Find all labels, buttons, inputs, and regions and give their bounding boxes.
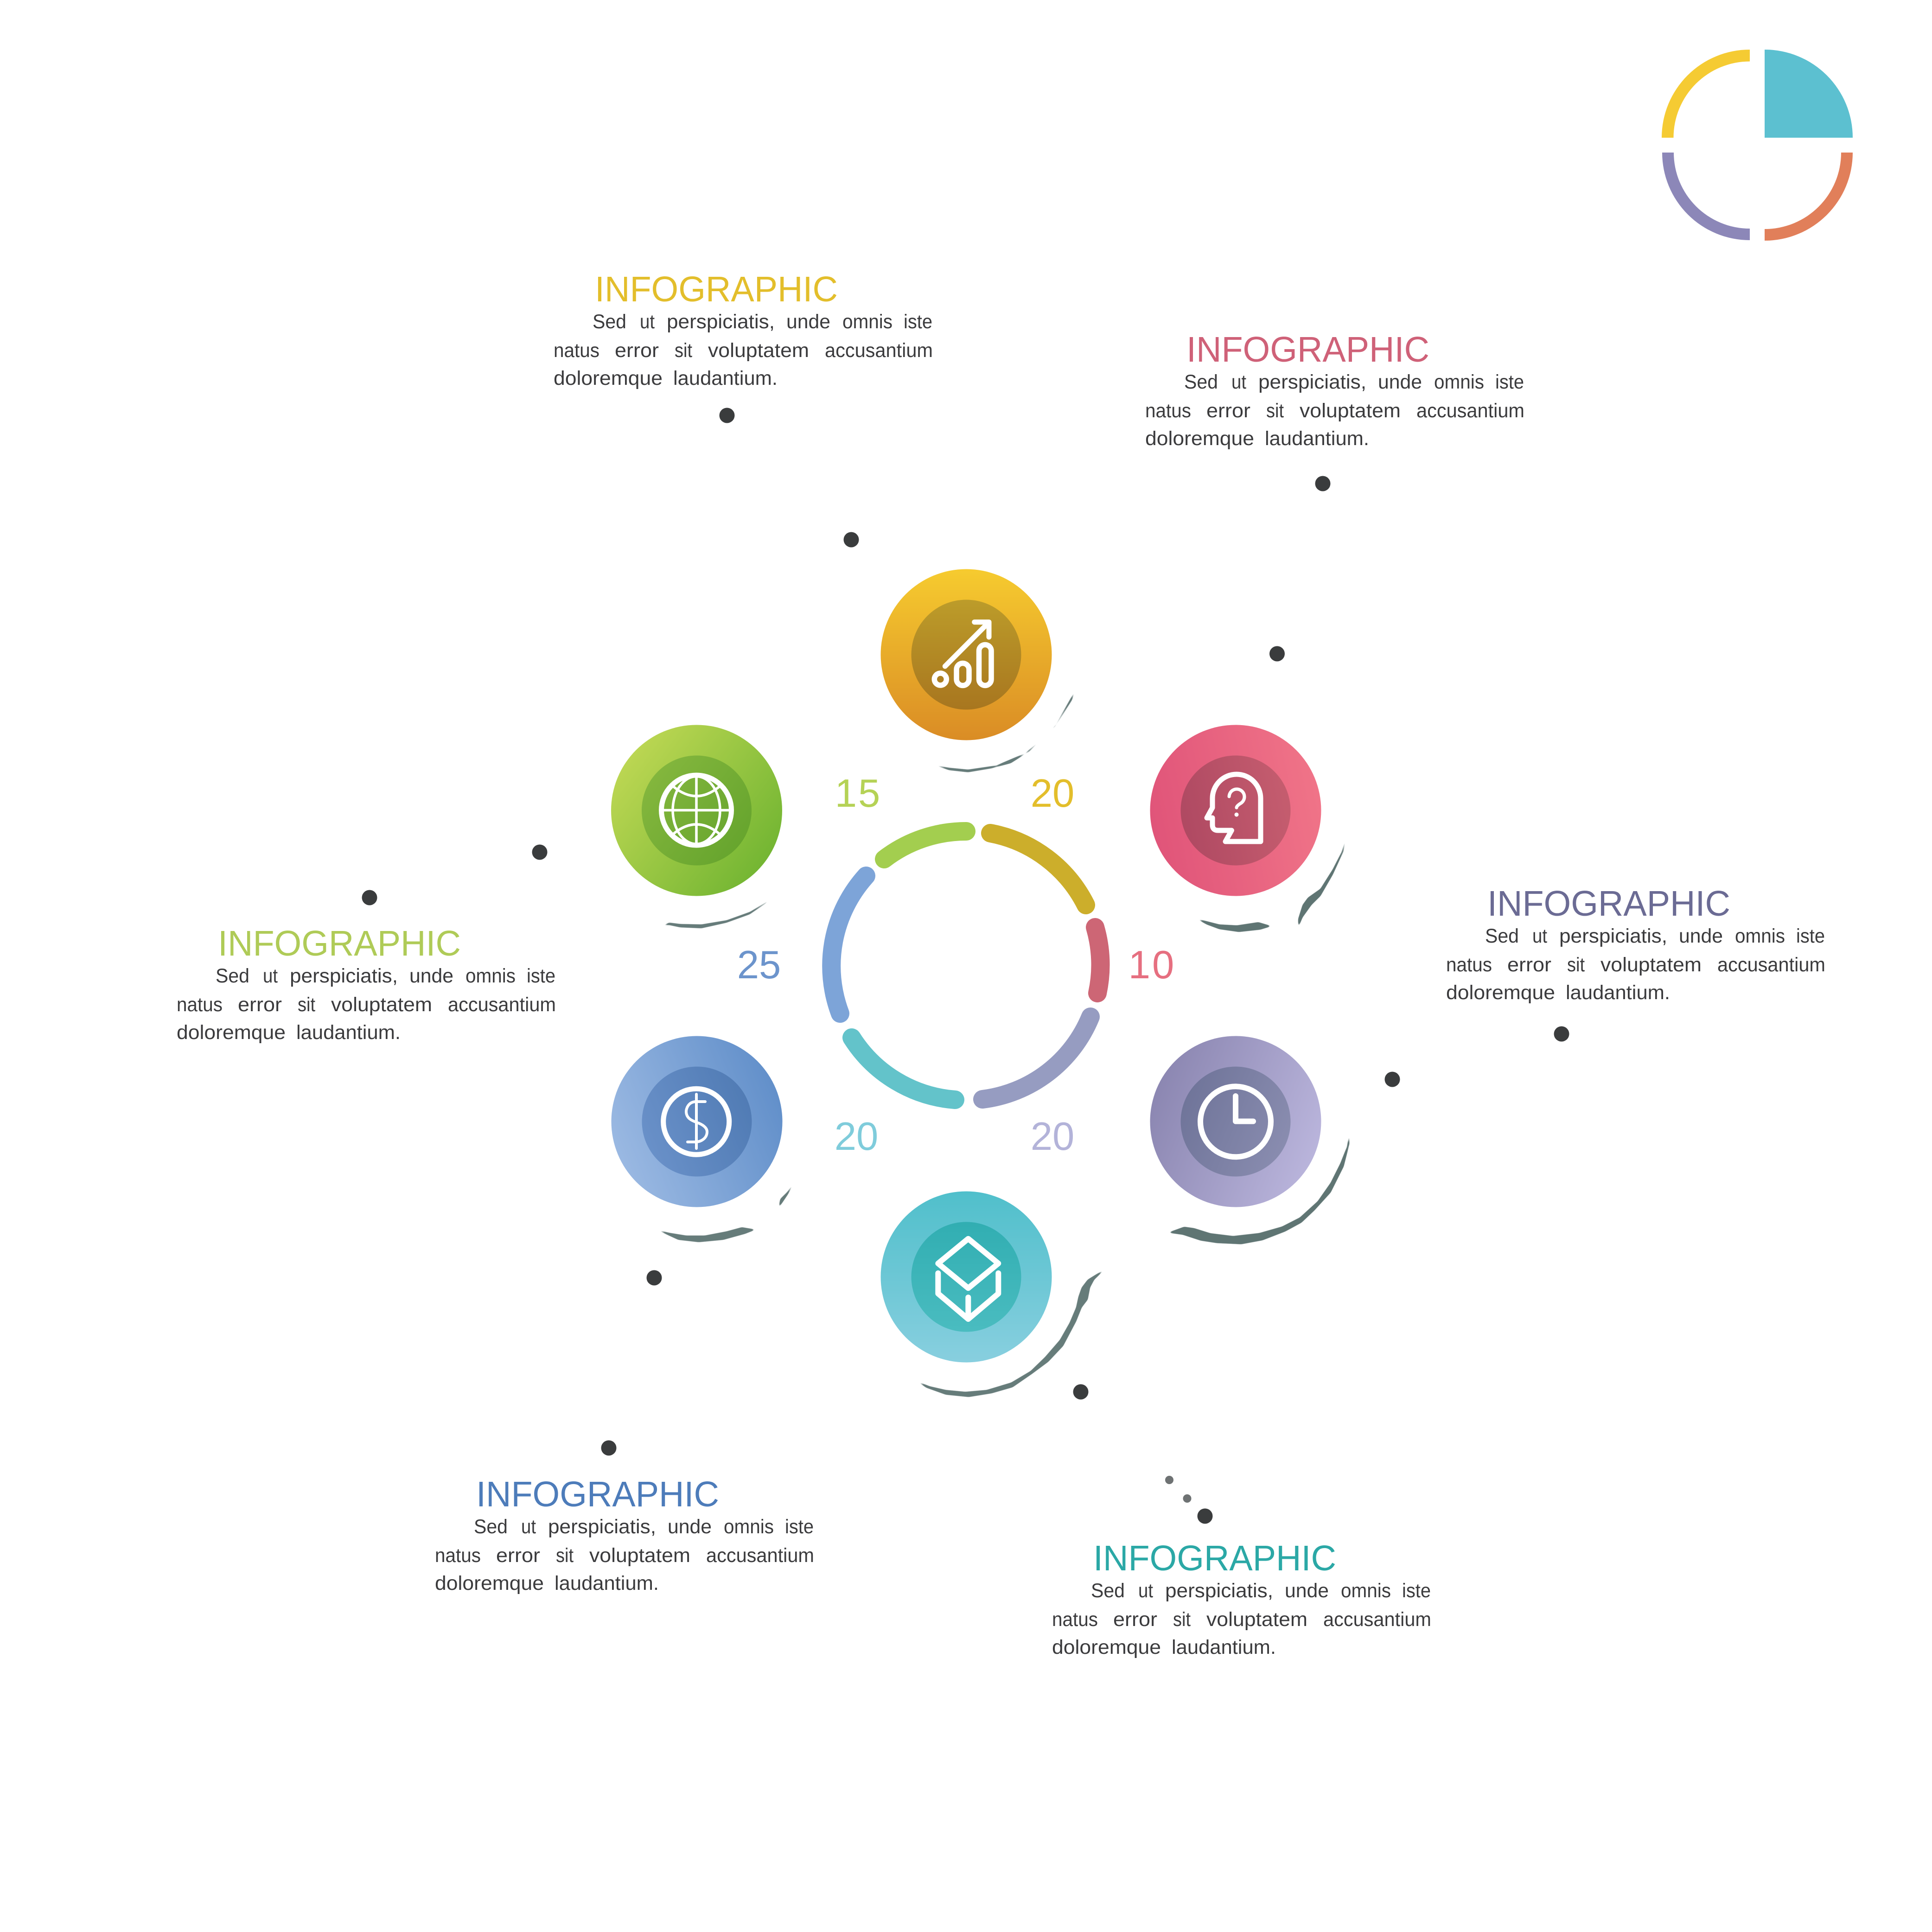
body: green: error <box>238 994 282 1016</box>
body: yellow: doloremque <box>554 367 663 389</box>
node: purple clock <box>1150 1036 1350 1244</box>
body: green: perspiciatis, <box>290 965 398 987</box>
body: pink: natus <box>1145 400 1191 422</box>
body: yellow: error <box>615 339 659 362</box>
body: pink: Sed <box>1184 371 1218 393</box>
inner disc: blue <box>642 1066 752 1177</box>
body: blue: voluptatem <box>589 1544 690 1567</box>
body: teal: perspiciatis, <box>1165 1580 1273 1602</box>
body: yellow: iste <box>904 311 932 333</box>
body: blue: doloremque <box>435 1572 544 1594</box>
body: blue: omnis <box>724 1516 774 1538</box>
body: green: Sed <box>216 965 249 987</box>
icon: clock <box>1200 1086 1271 1157</box>
brush arc: teal node <box>916 1269 1105 1397</box>
heading: pink: INFOGRAPHIC <box>1186 330 1429 370</box>
body: pink: sit <box>1266 400 1284 422</box>
value: 20 purple: 20 <box>1031 1115 1074 1159</box>
body: green: laudantium. <box>296 1021 401 1044</box>
body: yellow: voluptatem <box>708 339 809 362</box>
body: pink: omnis <box>1434 371 1484 393</box>
body: blue: Sed <box>474 1516 508 1538</box>
body: purple: sit <box>1567 954 1585 976</box>
body: yellow: accusantium <box>825 339 933 362</box>
body: purple: natus <box>1446 954 1492 976</box>
icon: head with question mark <box>1207 774 1261 842</box>
text block: green <box>177 924 556 1044</box>
body: purple: voluptatem <box>1600 954 1702 976</box>
ring segment: green 15 <box>884 831 966 859</box>
ring segment: red 10 <box>1095 927 1101 993</box>
outer disc: pink <box>1150 725 1321 896</box>
body: pink: voluptatem <box>1300 400 1401 422</box>
icon: dollar coin <box>663 1089 729 1154</box>
node: blue dollar <box>611 1036 803 1242</box>
body: teal: accusantium <box>1323 1608 1431 1631</box>
body: yellow: omnis <box>842 311 893 333</box>
body: purple: perspiciatis, <box>1559 925 1667 947</box>
body: teal: unde <box>1285 1580 1329 1602</box>
body: green: accusantium <box>448 994 556 1016</box>
body: yellow: sit <box>675 339 692 362</box>
body: purple: accusantium <box>1717 954 1825 976</box>
value: 25: 25 <box>737 943 781 987</box>
quarter ring chart top right <box>1662 50 1853 241</box>
outer disc: purple <box>1150 1036 1321 1207</box>
body: teal: error <box>1113 1608 1157 1631</box>
inner disc: teal <box>912 1222 1021 1332</box>
quarter: orange arc <box>1765 153 1853 241</box>
body: blue: natus <box>435 1544 481 1567</box>
body: blue: error <box>496 1544 540 1567</box>
inner disc: purple <box>1180 1066 1291 1177</box>
body: pink: doloremque <box>1145 427 1254 450</box>
heading: purple: INFOGRAPHIC <box>1487 884 1730 924</box>
quarter: teal filled pie <box>1765 50 1853 138</box>
body: purple: error <box>1507 954 1551 976</box>
connector dots <box>362 408 1569 1524</box>
body: blue <box>435 1516 814 1594</box>
body: yellow: unde <box>786 311 830 333</box>
body: teal: doloremque <box>1052 1636 1161 1658</box>
inner disc: green <box>642 756 752 865</box>
node: teal cube <box>881 1192 1105 1397</box>
brush arcs: blue node <box>655 1165 803 1242</box>
value: 20 yellow: 20 <box>1031 772 1074 816</box>
inner disc: pink <box>1180 756 1291 865</box>
value: 20 teal: 20 <box>835 1115 878 1159</box>
icon: cube <box>938 1239 998 1319</box>
body: yellow: laudantium. <box>673 367 778 389</box>
text block: purple <box>1446 884 1825 1004</box>
text block: yellow <box>554 269 933 389</box>
icon: growth chart <box>934 622 991 685</box>
body: teal: sit <box>1173 1608 1191 1631</box>
quarter: purple arc <box>1662 153 1750 240</box>
node: pink head <box>1150 725 1348 932</box>
body: green: omnis <box>465 965 516 987</box>
ring segment: teal 20 <box>852 1038 955 1100</box>
body: blue: sit <box>556 1544 574 1567</box>
body: yellow: perspiciatis, <box>667 311 775 333</box>
body: teal <box>1052 1580 1431 1658</box>
central segmented ring chart <box>831 831 1101 1100</box>
body: teal: natus <box>1052 1608 1098 1631</box>
brush arc: purple node <box>1168 1131 1350 1244</box>
body: blue: accusantium <box>706 1544 814 1567</box>
ring segment: blue 25 <box>831 876 866 1014</box>
body: pink: laudantium. <box>1265 427 1369 450</box>
brush arc: green node <box>662 889 780 928</box>
brush arc: yellow node <box>930 689 1076 772</box>
body: pink <box>1145 371 1524 450</box>
body: purple: doloremque <box>1446 982 1555 1004</box>
outer disc: green <box>611 725 782 896</box>
body: pink: error <box>1206 400 1250 422</box>
body: green: natus <box>177 994 223 1016</box>
heading: teal: INFOGRAPHIC <box>1093 1538 1336 1578</box>
text block: blue <box>435 1474 814 1594</box>
body: purple <box>1446 925 1825 1004</box>
brush arcs: pink node <box>1196 830 1348 932</box>
body: teal: iste <box>1402 1580 1431 1602</box>
body: green: doloremque <box>177 1021 286 1044</box>
body: purple: Sed <box>1485 925 1519 947</box>
body: blue: perspiciatis, <box>548 1516 656 1538</box>
body: green: ut <box>263 965 278 987</box>
ring segment: yellow 20 <box>990 833 1086 905</box>
body: yellow: ut <box>640 311 655 333</box>
body: purple: unde <box>1679 925 1723 947</box>
heading: blue: INFOGRAPHIC <box>476 1474 719 1514</box>
heading: green: INFOGRAPHIC <box>218 924 461 963</box>
body: pink: perspiciatis, <box>1258 371 1366 393</box>
value: 15: 15 <box>835 772 881 816</box>
body: blue: unde <box>668 1516 712 1538</box>
body: teal: laudantium. <box>1172 1636 1276 1658</box>
body: purple: laudantium. <box>1566 982 1670 1004</box>
quarter: yellow arc <box>1662 50 1750 138</box>
icon: globe <box>661 775 732 845</box>
body: blue: iste <box>785 1516 814 1538</box>
body: green <box>177 965 556 1044</box>
body: green: iste <box>527 965 555 987</box>
value: 10: 10 <box>1129 943 1176 987</box>
body: teal: omnis <box>1341 1580 1391 1602</box>
body: blue: laudantium. <box>555 1572 659 1594</box>
body: yellow <box>554 311 933 389</box>
body: teal: ut <box>1138 1580 1153 1602</box>
body: pink: unde <box>1378 371 1422 393</box>
body: purple: omnis <box>1735 925 1785 947</box>
body: green: sit <box>298 994 315 1016</box>
text block: teal <box>1052 1538 1431 1658</box>
node: yellow growth chart <box>881 569 1076 772</box>
node: green globe <box>611 725 782 928</box>
body: teal: voluptatem <box>1206 1608 1307 1631</box>
ring segment: purple 20 <box>982 1017 1090 1099</box>
text block: pink <box>1145 330 1524 450</box>
outer disc: yellow <box>881 569 1052 740</box>
body: yellow: Sed <box>593 311 626 333</box>
body: pink: ut <box>1231 371 1246 393</box>
body: yellow: natus <box>554 339 599 362</box>
inner disc: yellow <box>912 600 1021 709</box>
body: purple: iste <box>1796 925 1825 947</box>
body: green: unde <box>409 965 453 987</box>
body: pink: iste <box>1495 371 1524 393</box>
outer disc: teal <box>881 1192 1052 1362</box>
body: green: voluptatem <box>331 994 432 1016</box>
body: purple: ut <box>1532 925 1547 947</box>
body: blue: ut <box>521 1516 536 1538</box>
outer disc: blue <box>611 1036 783 1207</box>
body: pink: accusantium <box>1416 400 1524 422</box>
heading: yellow: INFOGRAPHIC <box>595 269 838 309</box>
body: teal: Sed <box>1091 1580 1125 1602</box>
